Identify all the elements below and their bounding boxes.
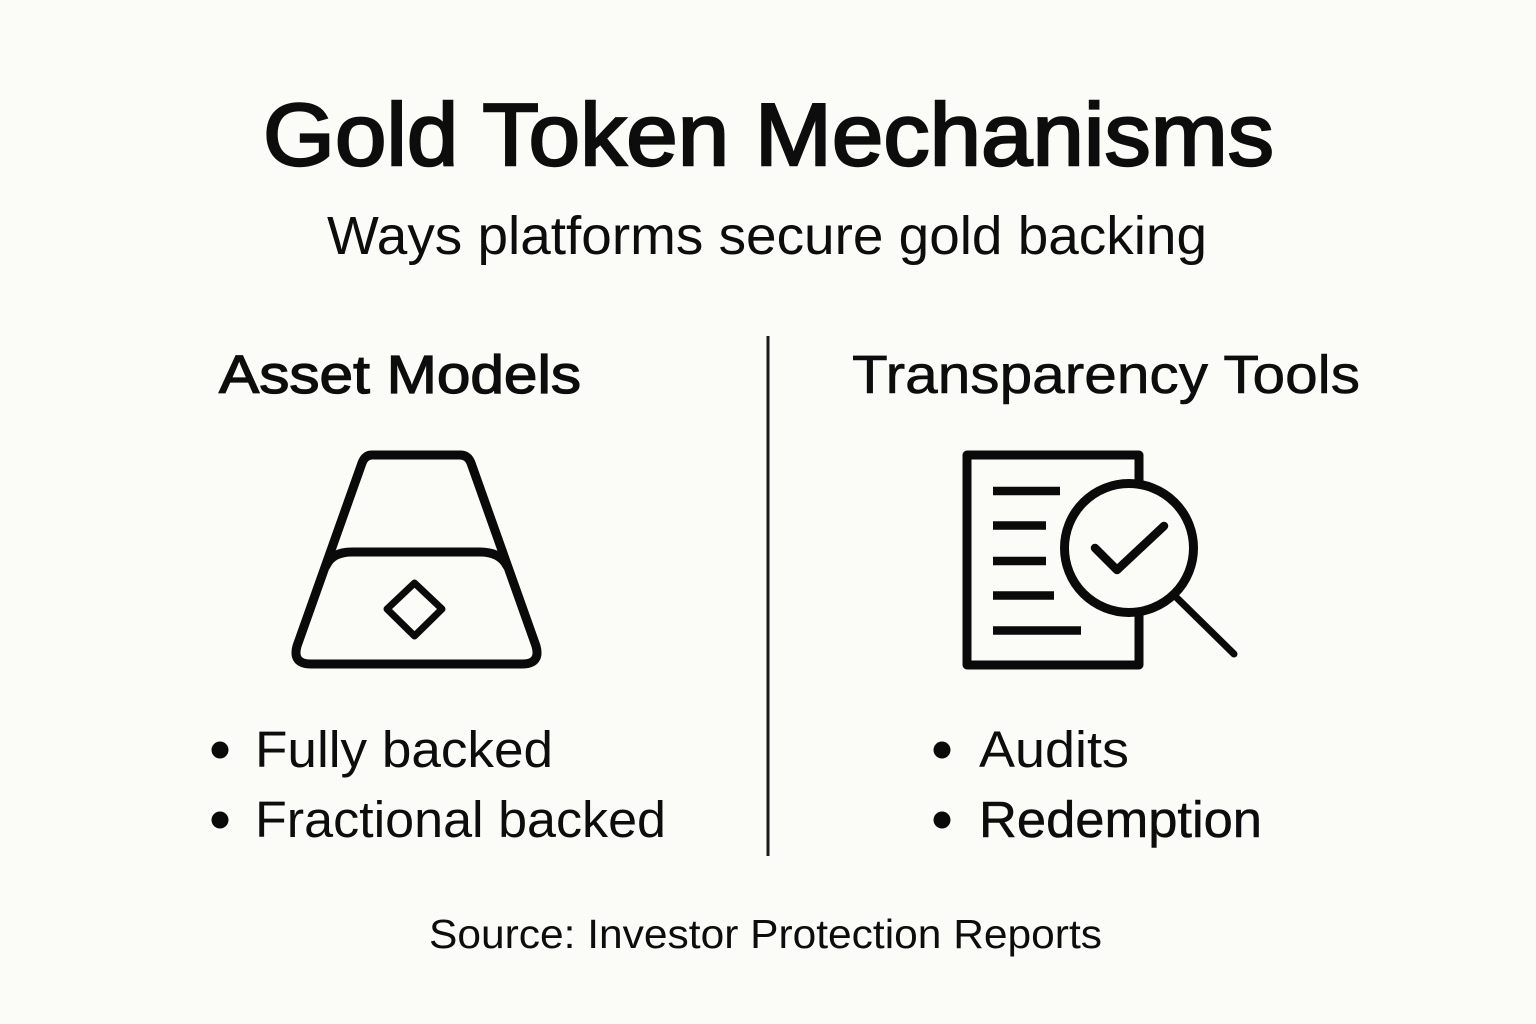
list: asset models [212,721,666,848]
heading: transparency tools: Transparency Tools [852,345,1360,405]
list: transparency tools [934,721,1262,848]
bullet item: fully backed: Fully backed [255,721,553,778]
title: Gold Token Mechanisms [263,85,1274,184]
icon: document with magnifying glass [967,455,1234,665]
panel: transparency tools [852,345,1360,848]
bullet item: audits: Audits [979,721,1129,778]
heading: asset models: Asset Models [219,345,581,405]
bullet item: fractional backed: Fractional backed [255,791,666,848]
subtitle: Ways platforms secure gold backing [327,206,1207,266]
panel: asset models [212,345,666,848]
divider [766,336,770,856]
bullet item: redemption: Redemption [979,791,1262,848]
source note: Source: Investor Protection Reports [429,911,1102,957]
icon: gold bar [296,455,537,664]
